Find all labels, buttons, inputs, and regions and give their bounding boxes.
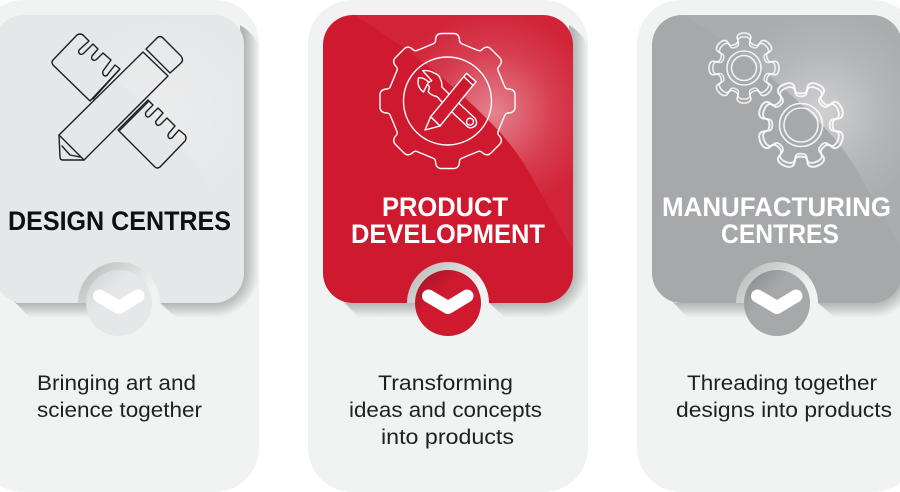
small gear bbox=[709, 33, 779, 103]
description: science together bbox=[37, 398, 202, 422]
pencil bbox=[431, 73, 476, 126]
card gloss bbox=[355, 15, 573, 250]
panel background bbox=[308, 0, 588, 492]
heading: manufacturing centres: MANUFACTURING bbox=[662, 192, 891, 222]
gear outline bbox=[380, 34, 515, 168]
toggle button bbox=[407, 262, 489, 336]
toggle button bbox=[736, 262, 818, 336]
heading: product development: DEVELOPMENT bbox=[351, 219, 545, 249]
heading: product development: PRODUCT bbox=[382, 192, 508, 222]
description: ideas and concepts bbox=[349, 398, 542, 422]
toggle button bbox=[78, 262, 160, 336]
description: designs into products bbox=[676, 398, 892, 422]
card bbox=[652, 15, 900, 303]
description bbox=[37, 371, 202, 422]
card bbox=[0, 15, 244, 303]
description bbox=[349, 371, 542, 449]
large gear bbox=[744, 68, 858, 182]
description: Bringing art and bbox=[37, 371, 196, 395]
panel: design centres bbox=[0, 0, 259, 492]
icon: ruler and pencil bbox=[52, 34, 186, 168]
icon: gear with wrench and pencil bbox=[380, 34, 515, 168]
wrench bbox=[423, 71, 477, 128]
description: into products bbox=[381, 425, 514, 449]
heading: design centres: DESIGN CENTRES bbox=[8, 206, 231, 236]
heading: product development bbox=[351, 192, 545, 249]
panel background bbox=[0, 0, 259, 492]
heading: manufacturing centres bbox=[662, 192, 891, 249]
panel: manufacturing centres bbox=[637, 0, 900, 492]
description: Threading together bbox=[687, 371, 877, 395]
description: Transforming bbox=[378, 371, 513, 395]
icon: two gears bbox=[709, 33, 858, 182]
panel background bbox=[637, 0, 900, 492]
card shadow bbox=[669, 273, 900, 318]
card gloss bbox=[684, 15, 900, 250]
card shadow bbox=[11, 25, 259, 318]
heading: manufacturing centres: CENTRES bbox=[721, 219, 839, 249]
card gloss bbox=[26, 15, 244, 250]
panel: product development bbox=[308, 0, 588, 492]
description bbox=[676, 371, 892, 422]
card shadow bbox=[340, 25, 588, 318]
card bbox=[323, 15, 573, 303]
